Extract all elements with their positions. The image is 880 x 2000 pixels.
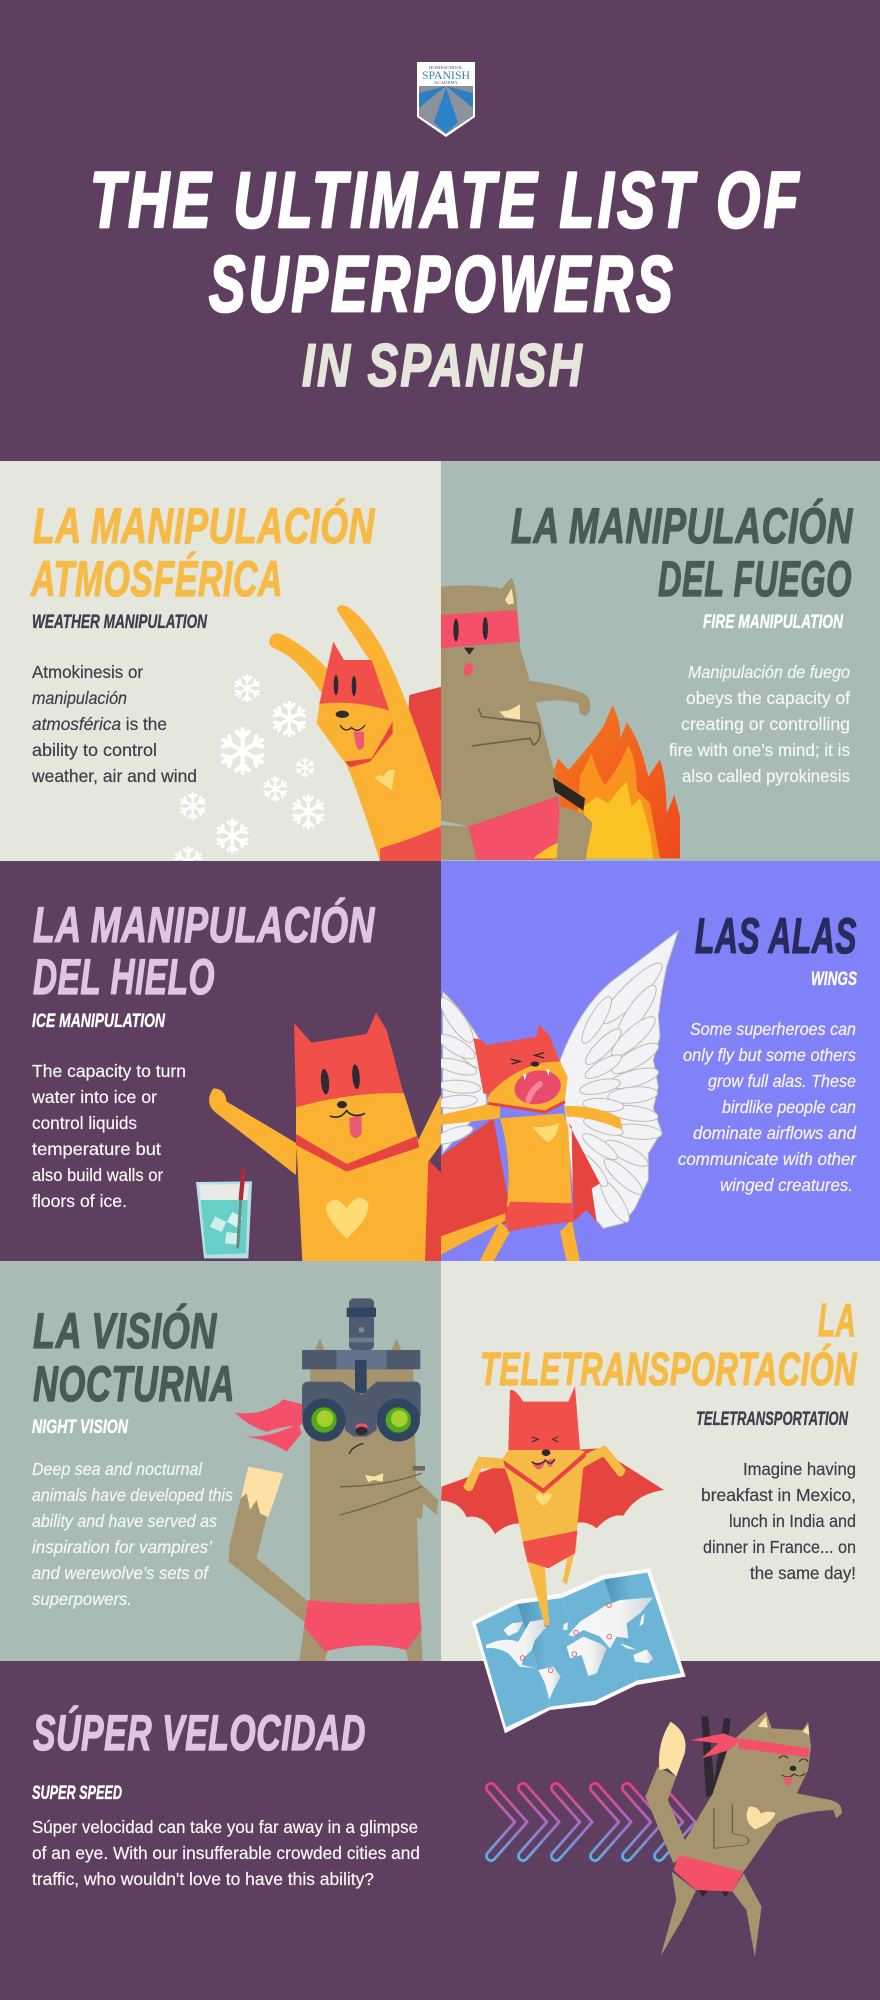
body text (32, 1817, 420, 1889)
body text: creating or controlling (681, 714, 850, 734)
body text: Manipulación de fuego (688, 662, 850, 682)
body text: temperature but (32, 1139, 161, 1159)
body text (31, 1061, 186, 1211)
night vision goggles (302, 1298, 421, 1442)
body text: floors of ice. (32, 1191, 127, 1211)
body text: traffic, who wouldn't love to have this ability? (32, 1869, 374, 1889)
glass of ice water (196, 1169, 252, 1258)
subheading: ICE MANIPULATION (32, 1011, 166, 1032)
body text: Deep sea and nocturnal (32, 1459, 203, 1479)
logo: Homeschool Spanish Academy: ACADEMY (434, 81, 458, 85)
body text: ability to control (32, 740, 157, 760)
heading: la manipulación del hielo: DEL HIELO (33, 949, 215, 1005)
body text: animals have developed this (32, 1485, 233, 1505)
illustration: snowflakes and cat (176, 605, 442, 876)
body text (31, 662, 197, 786)
body text: water into ice or (31, 1087, 157, 1107)
map markers (520, 1603, 612, 1673)
body text: winged creatures. (720, 1175, 853, 1195)
body text: The capacity to turn (32, 1061, 186, 1081)
logo: Homeschool Spanish Academy: SPANISH (422, 68, 470, 82)
panel: weather manipulation (0, 461, 442, 876)
heading: la manipulación atmosférica (30, 498, 375, 607)
header panel (0, 0, 880, 461)
illustration: cat with night vision goggles (228, 1298, 438, 1662)
body text: obeys the capacity of (686, 688, 850, 708)
body text: Súper velocidad can take you far away in a glimpse (32, 1817, 418, 1837)
subheading: WEATHER MANIPULATION (32, 612, 208, 633)
subheading: SUPER SPEED (32, 1783, 122, 1804)
heading: la visión nocturna: LA VISIÓN (33, 1303, 217, 1359)
body text: inspiration for vampires’ (32, 1537, 213, 1557)
body text: Atmokinesis or (32, 662, 143, 682)
panel: super speed (0, 1661, 880, 2000)
illustration: folded world map (472, 1568, 686, 1733)
body text: ability and have served as (32, 1511, 217, 1531)
flames (540, 705, 680, 858)
cat shouting (440, 1024, 623, 1262)
heading: súper velocidad: SÚPER VELOCIDAD (33, 1705, 366, 1761)
logo: Homeschool Spanish Academy: HOMESCHOOL (429, 65, 464, 70)
heading: la teletransportación: LA (818, 1294, 856, 1346)
heading: la visión nocturna (33, 1303, 235, 1412)
subheading: NIGHT VISION (32, 1417, 129, 1438)
panel: night vision (0, 1261, 441, 1662)
body text (669, 662, 850, 786)
heading: la manipulación del fuego (511, 498, 853, 607)
body text: manipulación (32, 688, 127, 708)
snowflakes (176, 676, 323, 876)
heading: la teletransportación (480, 1294, 857, 1395)
body text: also called pyrokinesis (682, 766, 850, 786)
logo: Homeschool Spanish Academy (417, 62, 475, 137)
continents (486, 1597, 653, 1699)
heading: la manipulación del hielo (33, 897, 375, 1005)
panel: teletransportation (441, 1261, 880, 1661)
panel: wings (432, 861, 880, 1262)
heading: la manipulación atmosférica: ATMOSFÉRICA (30, 551, 283, 607)
illustration: glass and cat (196, 1013, 442, 1262)
body text: lunch in India and (729, 1511, 856, 1531)
heading: la manipulación atmosférica: LA MANIPULACIÓN (33, 498, 375, 554)
body text: superpowers. (32, 1589, 132, 1609)
illustration: running cat (645, 1712, 842, 1957)
body text: atmosférica is the (32, 714, 167, 734)
body text: control liquids (32, 1113, 137, 1133)
body text: dominate airflows and (693, 1123, 857, 1143)
body text: communicate with other (678, 1149, 857, 1169)
body text: Some superheroes can (690, 1019, 856, 1039)
panel: ice manipulation (32, 897, 441, 1261)
body text: and werewolve’s sets of (32, 1563, 210, 1583)
body text: of an eye. With our insufferable crowded cities and (32, 1843, 420, 1863)
body text: Imagine having (743, 1459, 856, 1479)
bandana tails (235, 1399, 305, 1452)
body text: dinner in France... on (703, 1537, 856, 1557)
body text: fire with one’s mind; it is (669, 740, 850, 760)
speed chevrons (491, 1788, 689, 1856)
panel: fire manipulation (440, 461, 880, 861)
wings (432, 931, 678, 1228)
heading: la manipulación del hielo: LA MANIPULACIÓN (33, 897, 375, 953)
body text (32, 1459, 233, 1609)
body text: breakfast in Mexico, (701, 1485, 856, 1505)
body text: only fly but some others (683, 1045, 856, 1065)
title (90, 155, 802, 328)
body text: also build walls or (32, 1165, 163, 1185)
cat pointing (209, 1013, 442, 1262)
cat body (228, 1338, 438, 1662)
illustration: winged cat (432, 931, 678, 1262)
cat with raised arms (269, 605, 442, 862)
heading: la visión nocturna: NOCTURNA (33, 1356, 235, 1412)
illustration: caped cat above the map (441, 1386, 664, 1625)
title: SUPERPOWERS (209, 239, 676, 328)
body text: birdlike people can (722, 1097, 856, 1117)
body text: weather, air and wind (31, 766, 197, 786)
body text: the same day! (750, 1563, 856, 1583)
masked brown cat (440, 577, 593, 860)
body text: grow full alas. These (708, 1071, 856, 1091)
subheading: WINGS (811, 969, 857, 990)
subtitle: IN SPANISH (302, 332, 584, 399)
body text (678, 1019, 857, 1195)
body text (701, 1459, 856, 1583)
illustration: fire and cat (440, 577, 680, 860)
